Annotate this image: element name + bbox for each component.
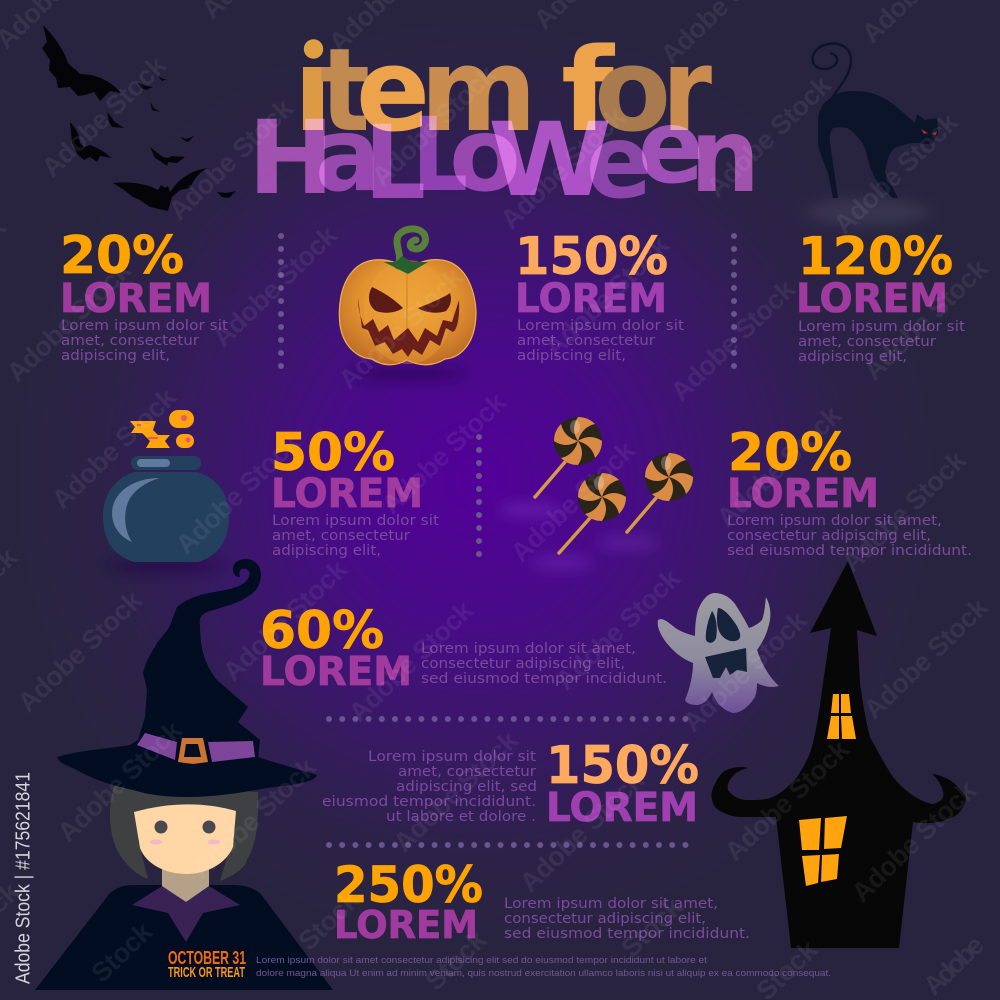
watermarks: Adobe Stock (52, 714, 188, 848)
stat: 50%: LOREM (271, 471, 423, 517)
stat: 20%: amet, consectetur (61, 333, 199, 349)
stock id sidebar: Adobe Stock | #175621841 (12, 772, 34, 984)
stat: 150% second: eiusmod tempor incididunt. (322, 794, 536, 810)
footer text (256, 955, 831, 979)
watermarks: Stock (85, 916, 159, 988)
title: item for: m (420, 24, 537, 158)
watermarks: Adobe Stock (539, 229, 675, 363)
title: item for (303, 24, 712, 158)
stat: 250%: Lorem ipsum dolor sit amet, (504, 896, 718, 912)
stat: 20%: LOREM (60, 276, 212, 322)
footer text: dolore magna aliqua Ut enim ad minim veniam, quis nostrud exercitation ullamco laboris nisi ut aliquip ex ea commodo consequat. (256, 968, 831, 979)
watermarks: Stock (419, 924, 493, 996)
title: Halloween: L (364, 104, 426, 223)
title: item for: f (561, 24, 616, 158)
hat buckle (178, 738, 208, 764)
stat: 60%: LOREM (260, 649, 412, 695)
stat: 20% second: Lorem ipsum dolor sit amet, (727, 513, 942, 529)
watermarks: Adobe Stock (163, 92, 299, 226)
watermarks: Adobe Stock (719, 733, 855, 867)
witch cape (35, 885, 333, 990)
watermarks: Adobe Stock (343, 594, 479, 728)
stat: 150% second: LOREM (546, 785, 698, 831)
title: item for: t (320, 24, 370, 158)
watermarks: Adobe Stock (711, 399, 847, 533)
stat: 50%: amet, consectetur (272, 528, 410, 544)
stat: 250%: 250% (334, 856, 483, 914)
stat: 150% second: ut labore et dolore . (386, 809, 536, 825)
icon: haunted house (711, 561, 966, 948)
stat: 150%: Lorem ipsum dolor sit (517, 318, 685, 334)
stat: 60%: Lorem ipsum dolor sit amet, (421, 641, 636, 657)
stat: 60%: consectetur adipiscing elit, (421, 656, 625, 672)
stat: 60%: sed eiusmod tempor incididunt. (421, 671, 667, 687)
watermarks: Adobe Stock (1, 254, 137, 388)
watermarks: Adobe Stock (846, 774, 982, 908)
title: Halloween: H (248, 99, 334, 218)
house windows (799, 694, 856, 886)
stat: 50%: adipiscing elit, (272, 543, 381, 559)
stat: 150% (515, 227, 685, 364)
stat: 60%: 60% (260, 601, 384, 661)
watermarks: Adobe Stock (550, 562, 686, 696)
title: Halloween: e (638, 88, 704, 207)
title: Halloween (248, 88, 760, 223)
stat: 250% (334, 856, 750, 947)
stat: 20% second (727, 423, 972, 559)
icon: jack-o-lantern pumpkin (339, 229, 476, 380)
watermarks: Adobe Stock (828, 106, 964, 240)
watermarks: Stock (615, 891, 689, 963)
stat: 20%: Lorem ipsum dolor sit (61, 318, 229, 334)
stat: 20%: adipiscing elit, (61, 348, 170, 364)
icon: ghost (658, 593, 779, 713)
bats (42, 25, 236, 211)
stat: 20% second: consectetur adipiscing elit, (727, 528, 931, 544)
stat: 20% (60, 226, 229, 364)
watermarks: Adobe Stock (46, 381, 182, 515)
title: item for: o (594, 24, 671, 158)
stat: 20% second: LOREM (727, 471, 879, 517)
stat: 150%: 150% (515, 227, 668, 287)
logo text: October 31 Trick or Treat: OCTOBER 31 (168, 948, 246, 968)
footer text: Lorem ipsum dolor sit amet consectetur adipisicing elit sed do eiusmod tempor incididunt ut labore et (256, 955, 707, 966)
witch eyes and cheeks (150, 820, 220, 844)
watermarks: Adobe Stock (376, 386, 512, 520)
stat: 150% second: 150% (546, 736, 699, 796)
title: Halloween: L (412, 96, 468, 215)
watermarks: Adobe Stock (207, 219, 343, 353)
stat: 120%: 120% (798, 227, 953, 287)
stat: 120%: adipiscing elit, (798, 349, 907, 365)
watermarks: Adobe Stock (836, 444, 972, 578)
icon: lollipops (498, 417, 693, 570)
stat: 120% (796, 227, 966, 365)
watermarks: Adobe Stock (388, 724, 524, 858)
watermarks: Adobe Stock (12, 584, 148, 718)
stat: 150% second: amet, consectetur (398, 764, 536, 780)
witch hair (110, 783, 258, 881)
title: Halloween: n (690, 97, 760, 216)
hat band (137, 733, 255, 762)
watermarks: Adobe Stock (170, 426, 306, 560)
title: Halloween: a (315, 96, 381, 215)
stat: 20%: 20% (60, 226, 184, 286)
watermarks: Adobe Stock (333, 261, 469, 395)
watermarks: Stock (292, 884, 366, 956)
witch face (134, 804, 236, 874)
logo text: October 31 Trick or Treat (168, 948, 246, 981)
witch neck (162, 868, 209, 902)
icon: witch (35, 559, 333, 990)
watermarks: Adobe Stock (217, 553, 353, 687)
stat: 120%: Lorem ipsum dolor sit (798, 319, 966, 335)
watermarks: Adobe Stock (495, 101, 631, 235)
title: item for: r (662, 24, 712, 158)
watermarks: Adobe Stock (36, 49, 172, 183)
stat: 150% second: adipiscing elit, sed (396, 779, 537, 795)
stat: 120%: amet, consectetur (798, 334, 936, 350)
stat: 250%: LOREM (334, 903, 478, 947)
icon: cauldron (103, 410, 229, 573)
title: Halloween: o (449, 96, 521, 215)
witch collar (132, 886, 240, 942)
watermarks: Adobe Stock (665, 273, 801, 407)
watermarks: Adobe Stock (677, 604, 813, 738)
witch hat (57, 559, 317, 797)
title: Halloween: W (488, 101, 612, 220)
stat: 250%: consectetur adipiscing elit, (504, 911, 706, 927)
stat: 150% second: Lorem ipsum dolor sit (368, 749, 537, 765)
stat: 150% second (322, 736, 699, 831)
watermarks: Adobe Stock (366, 58, 502, 192)
stat: 250%: sed eiusmod tempor incididunt. (504, 926, 750, 942)
stat: 150%: amet, consectetur (517, 333, 655, 349)
watermarks: Adobe Stock (186, 751, 322, 885)
icon: black cat (806, 44, 938, 225)
stat: 20% second: sed eiusmod tempor incididunt. (727, 543, 972, 559)
title: item for: e (356, 24, 430, 158)
stat: 150%: adipiscing elit, (517, 348, 626, 364)
stat: 50% (271, 423, 440, 559)
stat: 60% (260, 601, 667, 695)
stat: 50%: 50% (271, 423, 395, 483)
stat: 50%: Lorem ipsum dolor sit (272, 513, 440, 529)
title: Halloween: e (586, 103, 652, 222)
stat: 120%: LOREM (796, 276, 948, 322)
logo text: October 31 Trick or Treat: TRICK OR TREAT (168, 964, 245, 981)
watermarks: Adobe Stock (514, 764, 650, 898)
watermarks: Adobe (917, 930, 990, 1000)
watermarks: Adobe Stock (858, 252, 994, 386)
stat: 20% second: 20% (728, 423, 852, 483)
watermarks: Adobe Stock (701, 69, 837, 203)
dotted dividers (281, 236, 734, 845)
watermarks: Adobe Stock (505, 434, 641, 568)
stat: 150%: LOREM (515, 276, 667, 322)
watermarks: Adobe Stock (858, 591, 994, 725)
